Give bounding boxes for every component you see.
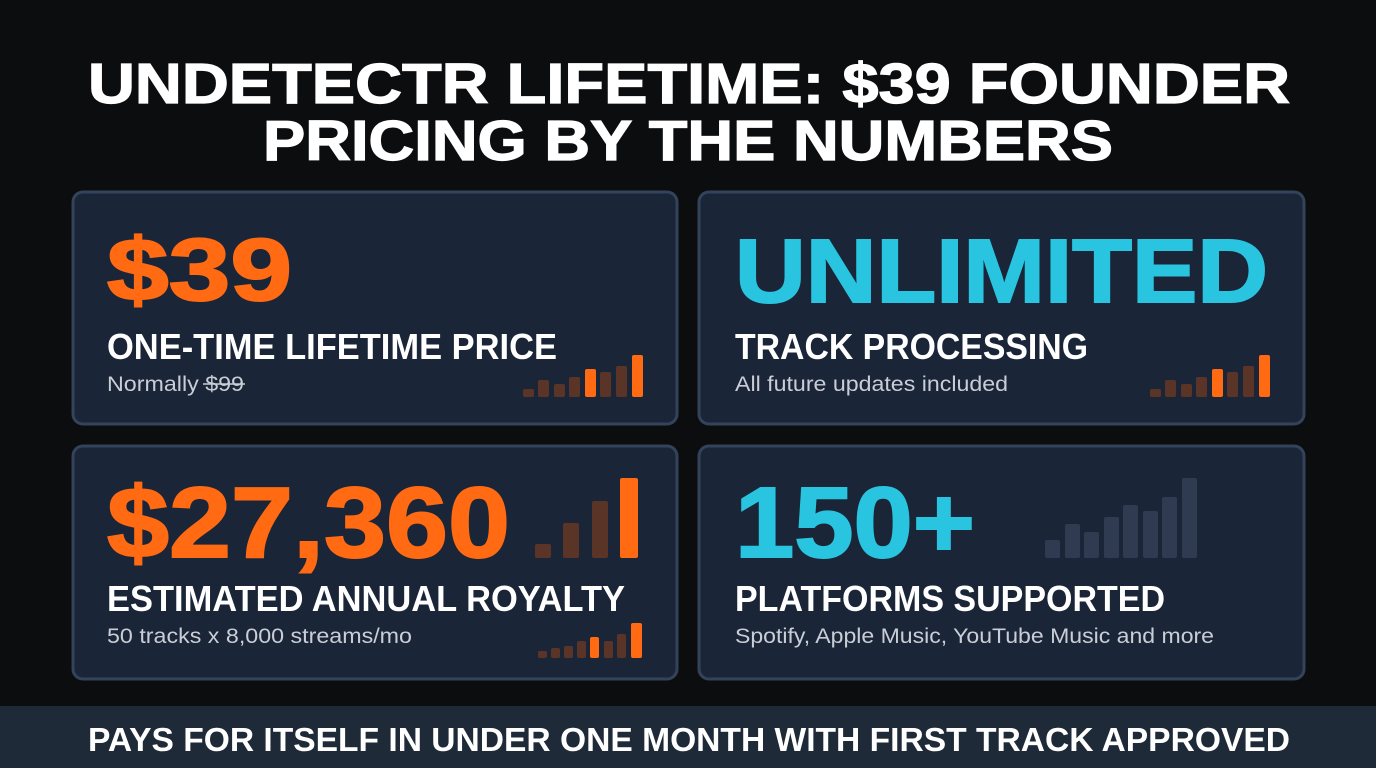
subtext: updates: All future updates included bbox=[735, 373, 1008, 396]
footer banner bbox=[0, 706, 1376, 768]
bar chart: small orange bbox=[538, 623, 642, 658]
footer banner: PAYS FOR ITSELF IN UNDER ONE MONTH WITH FIRST TRACK APPROVED bbox=[88, 721, 1290, 758]
label: platforms supported: PLATFORMS SUPPORTED bbox=[735, 578, 1165, 619]
label: track processing: TRACK PROCESSING bbox=[735, 326, 1088, 367]
label: one-time lifetime price: ONE-TIME LIFETIME PRICE bbox=[107, 326, 557, 367]
big number: $27,360: $27,360 bbox=[107, 467, 510, 579]
bar chart: muted blue bbox=[1045, 478, 1197, 558]
title bbox=[88, 52, 1290, 173]
big number: 150+: 150+ bbox=[735, 467, 975, 579]
title: PRICING BY THE NUMBERS bbox=[263, 109, 1113, 173]
subtext: normally $99: Normally $99 bbox=[107, 373, 244, 396]
subtext: tracks x streams: 50 tracks x 8,000 streams/mo bbox=[107, 625, 412, 648]
big number: $39: $39 bbox=[107, 220, 292, 319]
panel: platforms supported bbox=[699, 446, 1304, 679]
title: UNDETECTR LIFETIME: $39 FOUNDER bbox=[88, 52, 1290, 116]
label: estimated annual royalty: ESTIMATED ANNUAL ROYALTY bbox=[107, 578, 625, 619]
bar chart: small orange bbox=[523, 355, 643, 397]
bar chart: small orange bbox=[1150, 355, 1270, 397]
big number: unlimited: UNLIMITED bbox=[735, 222, 1268, 322]
panel: unlimited processing bbox=[699, 192, 1304, 424]
bar chart: large orange bbox=[535, 478, 638, 558]
subtext: platform list: Spotify, Apple Music, YouTube Music and more bbox=[735, 625, 1214, 648]
panel: lifetime price bbox=[73, 192, 677, 424]
panel: annual royalty bbox=[73, 446, 677, 679]
